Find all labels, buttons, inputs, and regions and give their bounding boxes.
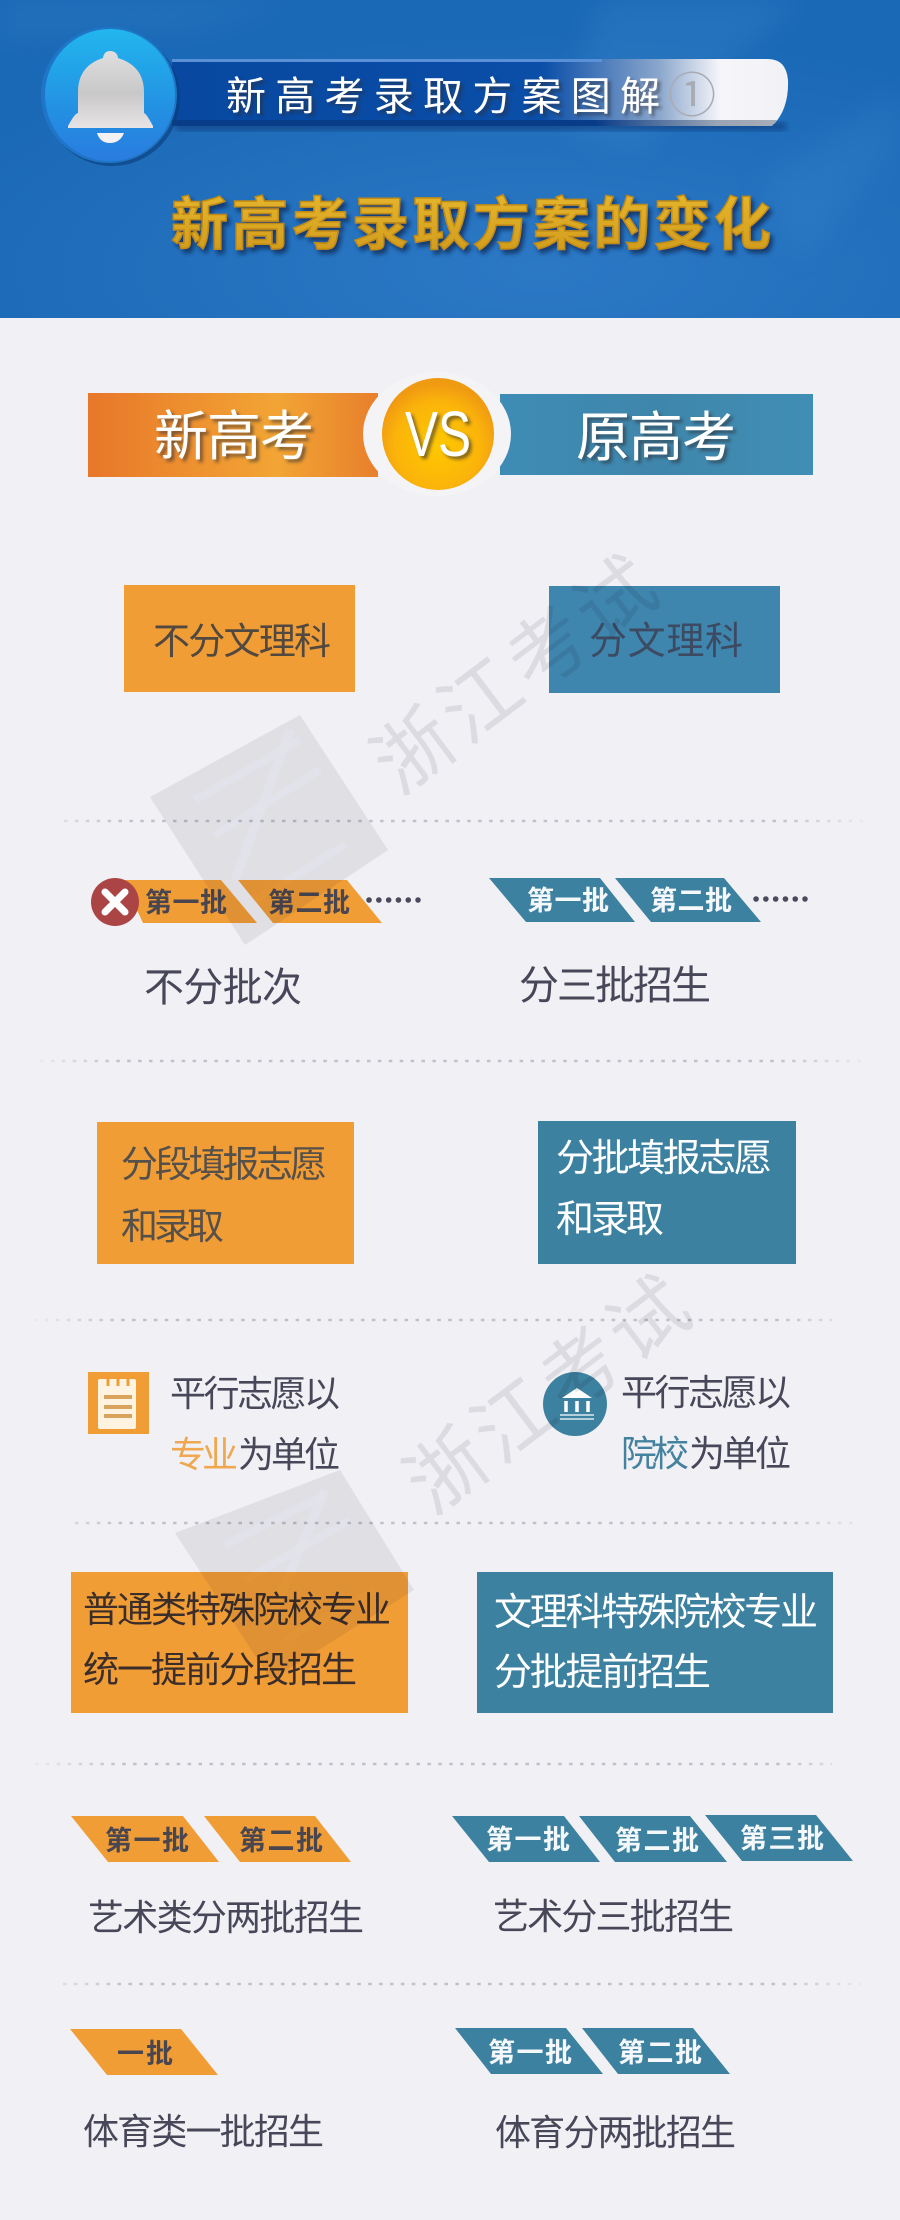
new: major based — [88, 1372, 340, 1475]
box: no arts and science split — [124, 585, 355, 692]
old gaokao banner — [500, 394, 813, 475]
text: 平行志愿以 — [621, 1372, 791, 1413]
icon: bell — [41, 27, 180, 166]
box: unified early admission — [71, 1572, 408, 1713]
old: sports two batches: 第一批 — [488, 2038, 572, 2068]
old: art three batches: 第三批 — [740, 1824, 824, 1854]
box: by score segment — [97, 1122, 354, 1264]
bar title text: 新高考录取方案图解 — [226, 75, 660, 119]
box: by score segment: 和录取 — [121, 1206, 224, 1247]
old: school based — [543, 1372, 791, 1474]
new: sports one batch — [70, 2029, 324, 2152]
batch tags — [123, 880, 382, 923]
batch tags: 第一批 — [527, 886, 609, 916]
box: unified early admission: 统一提前分段招生 — [83, 1649, 357, 1690]
old gaokao banner: 原高考 — [576, 408, 736, 468]
watermark: lower: 浙江考试 — [389, 1261, 706, 1530]
vs badge — [363, 372, 511, 496]
new: sports one batch: 一批 — [117, 2039, 173, 2069]
vs badge: VS — [405, 398, 471, 470]
label: 不分批次 — [144, 966, 302, 1010]
watermark: lower — [175, 1261, 706, 1680]
new: art two batches: 第一批 — [105, 1826, 189, 1856]
batch tags: 第二批 — [268, 888, 350, 918]
gold title: 新高考录取方案的变化 — [171, 193, 771, 257]
text: 平行志愿以 — [170, 1373, 340, 1414]
old: sports two batches: 第二批 — [618, 2038, 702, 2068]
header banner — [0, 0, 900, 318]
old: art three batches: 第一批 — [486, 1825, 570, 1855]
watermark: upper: 浙江考试 — [356, 541, 673, 810]
batch tags: 第一批 — [145, 888, 227, 918]
old: art three batches: 艺术分三批招生 — [493, 1896, 734, 1937]
row: sports category — [70, 2028, 736, 2153]
label: 分三批招生 — [519, 964, 711, 1008]
box: by batch: 分批填报志愿 — [556, 1138, 772, 1180]
old: art three batches — [452, 1815, 853, 1937]
text: 院校 — [621, 1433, 689, 1474]
new gaokao banner: 新高考 — [154, 407, 314, 467]
icon: cross — [91, 878, 139, 926]
box: by batch: 和录取 — [556, 1199, 664, 1241]
old: sports two batches — [455, 2028, 736, 2153]
old: sports two batches: 体育分两批招生 — [495, 2112, 736, 2153]
new: art two batches: 第二批 — [239, 1826, 323, 1856]
ellipsis dots — [369, 897, 418, 903]
text: 为单位 — [238, 1434, 340, 1475]
box: arts and science split: 分文理科 — [589, 621, 743, 663]
title bar — [172, 59, 788, 131]
batch tags — [489, 878, 761, 922]
icon: notebook — [88, 1372, 149, 1434]
watermark: upper — [150, 541, 673, 945]
box: batch early admission — [477, 1572, 833, 1713]
box: unified early admission: 普通类特殊院校专业 — [83, 1589, 391, 1630]
row: arts and science division — [124, 585, 780, 693]
box: by score segment: 分段填报志愿 — [121, 1144, 327, 1185]
batch tags: 第二批 — [650, 886, 732, 916]
new gaokao banner — [88, 393, 378, 477]
ellipsis dots — [756, 896, 805, 902]
box: no arts and science split: 不分文理科 — [153, 621, 331, 662]
row: application and admission — [97, 1121, 796, 1264]
new: no batches — [91, 878, 418, 1010]
circled number: ① — [668, 70, 716, 123]
new: art two batches — [71, 1816, 364, 1938]
text: 为单位 — [689, 1433, 791, 1474]
new: sports one batch: 体育类一批招生 — [83, 2111, 324, 2152]
box: batch early admission: 分批提前招生 — [494, 1652, 711, 1694]
old: art three batches: 第二批 — [615, 1826, 699, 1856]
box: batch early admission: 文理科特殊院校专业 — [494, 1592, 818, 1634]
text: 专业 — [170, 1434, 238, 1475]
text — [170, 1373, 340, 1475]
old: three batches — [489, 878, 805, 1008]
new: art two batches: 艺术类分两批招生 — [88, 1897, 364, 1938]
icon: school building — [543, 1372, 607, 1436]
box: by batch — [538, 1121, 796, 1264]
divider lines — [34, 821, 863, 1984]
box: arts and science split — [549, 586, 780, 693]
vs banner — [88, 372, 813, 496]
row: special institutions — [71, 1572, 833, 1713]
text — [621, 1372, 791, 1474]
row: parallel preference — [88, 1372, 791, 1475]
row: batches — [91, 878, 805, 1010]
row: art category — [71, 1815, 853, 1938]
